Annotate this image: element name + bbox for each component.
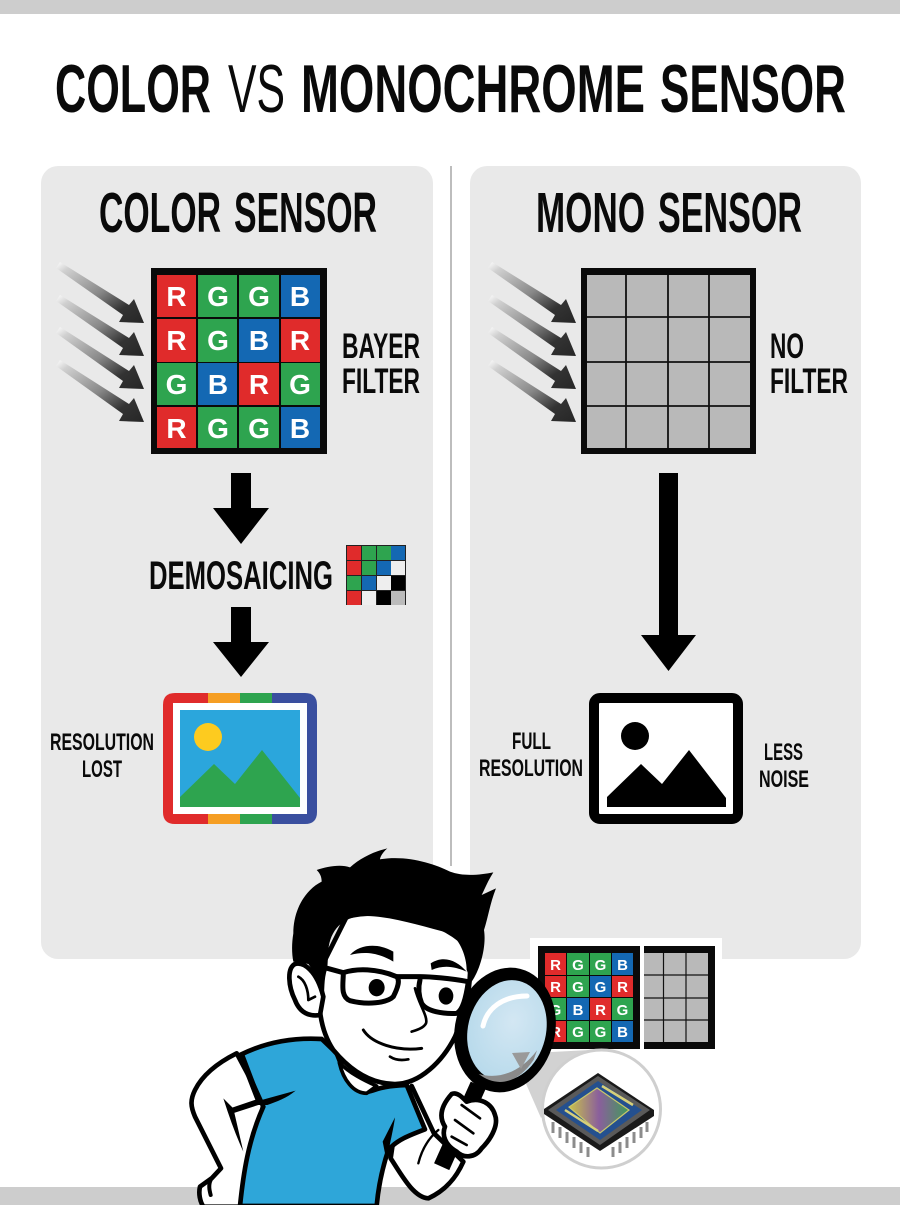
heading: mono sensor <box>536 181 802 245</box>
bayer filter grid: G <box>248 413 270 444</box>
bayer filter grid: G <box>207 281 229 312</box>
inset: color sensor card: B <box>617 957 628 974</box>
fingers <box>452 1105 480 1145</box>
label: no filter <box>770 327 848 401</box>
bayer filter grid: G <box>248 281 270 312</box>
bayer filter grid: B <box>249 325 269 356</box>
hair <box>292 848 496 1000</box>
ear <box>289 964 323 1015</box>
bayer filter grid: G <box>289 369 311 400</box>
top band <box>0 0 900 14</box>
magnifying glass lens <box>441 957 569 1103</box>
eyebrows <box>350 946 467 972</box>
label: less noise: NOISE <box>759 766 809 793</box>
inset: color sensor card: G <box>595 1024 606 1041</box>
heading: mono sensor: MONO <box>536 181 645 245</box>
divider line <box>450 166 452 866</box>
ear detail <box>298 977 315 1000</box>
label: less noise: LESS <box>764 739 803 766</box>
eyes <box>369 979 453 1005</box>
label: no filter: FILTER <box>770 362 848 401</box>
light ray arrows <box>56 262 144 422</box>
inset: color sensor card: G <box>572 979 584 996</box>
inset: color sensor card: B <box>617 1024 628 1041</box>
bayer filter grid: G <box>166 369 187 400</box>
label: resolution lost <box>50 729 154 783</box>
heading: color sensor: COLOR <box>99 181 221 245</box>
inset: color sensor card: R <box>595 1002 606 1019</box>
heading: color sensor: SENSOR <box>234 181 377 245</box>
glasses <box>327 968 468 1013</box>
label: full resolution: RESOLUTION <box>479 755 583 782</box>
title: VS <box>228 51 285 127</box>
inset: color sensor card: R <box>617 979 628 996</box>
light ray arrows <box>488 262 576 422</box>
label: resolution lost: LOST <box>82 756 122 783</box>
bayer filter grid: G <box>207 413 229 444</box>
label: bayer filter <box>342 327 420 401</box>
label: demosaicing: DEMOSAICING <box>149 554 333 598</box>
title: MONOCHROME <box>301 51 645 127</box>
mono sensor grid <box>581 268 756 454</box>
sleeve details <box>237 1053 395 1162</box>
magnifier handle <box>442 1085 478 1167</box>
icon: demosaicing mini grid <box>346 545 406 605</box>
hand <box>441 1093 496 1156</box>
left arm <box>191 1053 263 1205</box>
thumb hook <box>209 1180 211 1195</box>
label: bayer filter: BAYER <box>342 327 420 366</box>
icon: zoomed sensor chip callout <box>513 1050 660 1168</box>
inset: color sensor card: G <box>550 1002 561 1019</box>
bayer filter grid: B <box>290 413 310 444</box>
icon: color image with rainbow frame <box>163 693 317 824</box>
title <box>55 51 846 127</box>
inset: color sensor card: B <box>573 1002 584 1019</box>
inset: color sensor card: R <box>550 1024 561 1041</box>
arm crease <box>223 1098 258 1152</box>
lens body <box>441 957 569 1103</box>
label: full resolution <box>479 728 583 782</box>
inset: color sensor card: R <box>550 957 561 974</box>
bayer filter grid <box>151 268 327 454</box>
bayer filter grid: R <box>166 281 187 312</box>
arrow: sensor to image <box>641 473 696 671</box>
inset: color sensor card <box>538 946 640 1049</box>
inset: color sensor card: R <box>550 979 561 996</box>
inset: color sensor card: G <box>595 979 606 996</box>
inset: color sensor card: G <box>572 957 584 974</box>
label: no filter: NO <box>770 327 804 366</box>
panel: color sensor <box>41 166 433 959</box>
label: less noise <box>759 739 809 793</box>
face <box>319 913 470 1084</box>
glare <box>483 996 527 1026</box>
bayer filter grid: R <box>290 325 310 356</box>
panel background <box>41 166 433 959</box>
bayer filter grid: B <box>290 281 310 312</box>
title: COLOR <box>55 51 211 127</box>
bayer filter grid: R <box>166 325 187 356</box>
inset: color sensor card: G <box>617 1002 628 1019</box>
bayer filter grid: R <box>249 369 269 400</box>
bayer filter grid: R <box>166 413 187 444</box>
inset: color sensor card: G <box>572 1024 584 1041</box>
inset: color sensor card: G <box>595 957 606 974</box>
white backing behind sensor cards <box>530 938 722 962</box>
collar <box>339 1063 377 1093</box>
arrow: filter to demosaicing <box>213 473 269 544</box>
panel: mono sensor <box>470 166 861 959</box>
label: bayer filter: FILTER <box>342 362 420 401</box>
forearm crease <box>418 1130 438 1163</box>
label: full resolution: FULL <box>512 728 551 755</box>
callout pointer on lens <box>512 1052 530 1069</box>
bayer filter grid: G <box>207 325 229 356</box>
heading: mono sensor: SENSOR <box>658 181 802 245</box>
blue t-shirt <box>240 1039 425 1205</box>
bottom band <box>0 1187 900 1205</box>
bayer filter grid: B <box>208 369 228 400</box>
character: person with magnifying glass <box>191 848 496 1205</box>
inset: mono sensor card <box>644 946 715 1049</box>
nose and smile <box>363 988 426 1060</box>
icon: monochrome image <box>594 698 738 819</box>
panel background <box>470 166 861 959</box>
arrow: demosaicing to image <box>213 607 269 677</box>
label: resolution lost: RESOLUTION <box>50 729 154 756</box>
right arm and neck <box>391 1086 463 1198</box>
